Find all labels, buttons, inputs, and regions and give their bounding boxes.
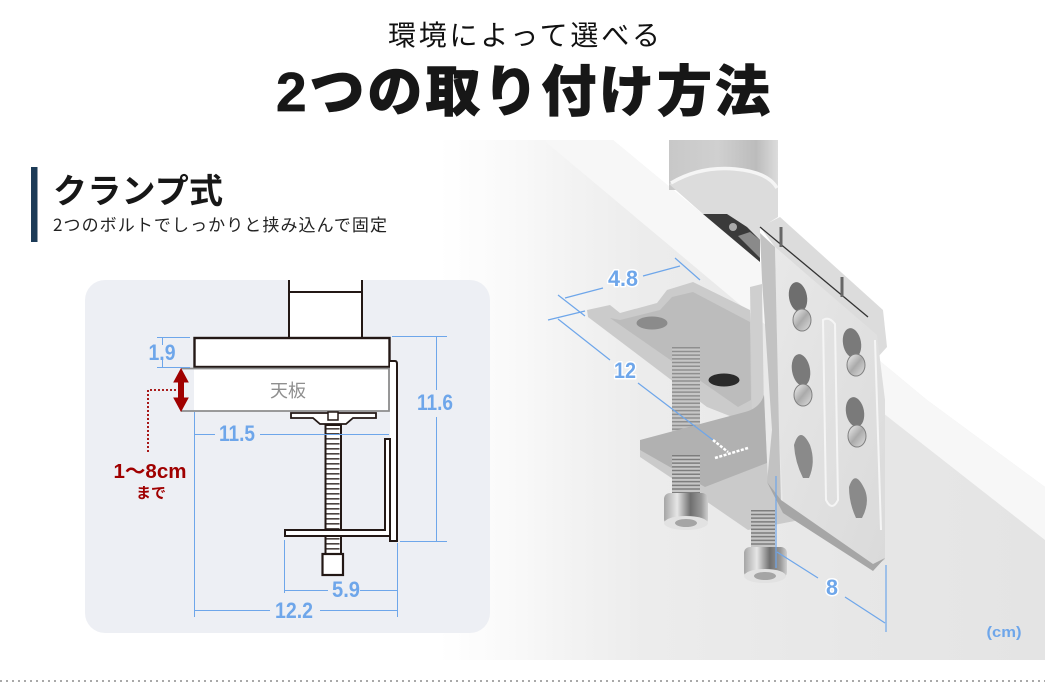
upper bracket arm	[587, 282, 754, 420]
dimension lines	[157, 336, 447, 617]
dimension lines: 4.8	[558, 258, 700, 316]
panel background	[85, 280, 490, 633]
photo: clamp mounted under desk	[400, 140, 1045, 660]
label 11.5: 11.5	[219, 421, 255, 446]
threaded bolt	[322, 425, 343, 575]
bolt stem cap	[328, 412, 338, 420]
upper bolt head	[664, 493, 708, 530]
white area above desk	[613, 140, 1045, 487]
label 12.2: 12.2	[275, 598, 313, 623]
perforated plate	[775, 247, 885, 566]
plate ribs	[823, 319, 881, 530]
title: main heading: 2つの取り付け方法	[276, 61, 770, 123]
dotted leader	[148, 390, 176, 453]
plate left edge	[760, 233, 781, 502]
dimension lines: 8	[776, 476, 886, 632]
dark slit under mount	[703, 214, 760, 262]
bracket holes	[636, 316, 668, 330]
bottom dotted rule	[0, 680, 1045, 682]
outer clamp frame	[390, 361, 397, 541]
unit label: (cm)	[986, 624, 1022, 641]
plate lower edge	[767, 482, 885, 571]
desk top board	[181, 368, 389, 411]
section description: 2つのボルトでしっかりと挟み込んで固定	[53, 211, 387, 236]
lower bracket arm	[640, 395, 800, 530]
plate slots	[787, 281, 867, 518]
panel: clamp dimension diagram	[85, 280, 490, 633]
dimension lines: 12	[548, 311, 748, 458]
adjustment range arrow	[174, 369, 188, 411]
label 1.9: 1.9	[148, 340, 176, 365]
title: lead line: 環境によって選べる	[388, 14, 660, 54]
label 4.8: 4.8	[608, 266, 638, 291]
upper bolt thread	[672, 347, 700, 493]
inner clamp arm	[285, 439, 390, 536]
label 5.9: 5.9	[332, 577, 360, 602]
collar	[669, 168, 778, 240]
rear mount block	[760, 217, 887, 357]
label 11.6: 11.6	[417, 390, 453, 415]
section heading: クランプ式	[53, 164, 223, 213]
pole	[289, 280, 362, 338]
top clamp block	[194, 338, 390, 367]
upper bolt lower part	[672, 455, 700, 495]
plate screws	[793, 309, 866, 447]
photo background	[400, 140, 1045, 660]
bracket hole dark	[708, 374, 740, 386]
range label suffix: まで	[136, 482, 166, 503]
label 12: 12	[614, 358, 636, 383]
lower bolt thread	[751, 510, 775, 548]
vertical flange	[750, 284, 764, 415]
range label: 1〜8cm	[114, 461, 186, 483]
pole	[669, 140, 778, 190]
pressure plate	[291, 413, 376, 424]
desk label: 天板	[270, 377, 306, 403]
heading accent bar	[31, 167, 38, 242]
label 8: 8	[826, 575, 838, 600]
lower bolt head	[744, 547, 787, 583]
desk edge band	[545, 140, 1045, 540]
